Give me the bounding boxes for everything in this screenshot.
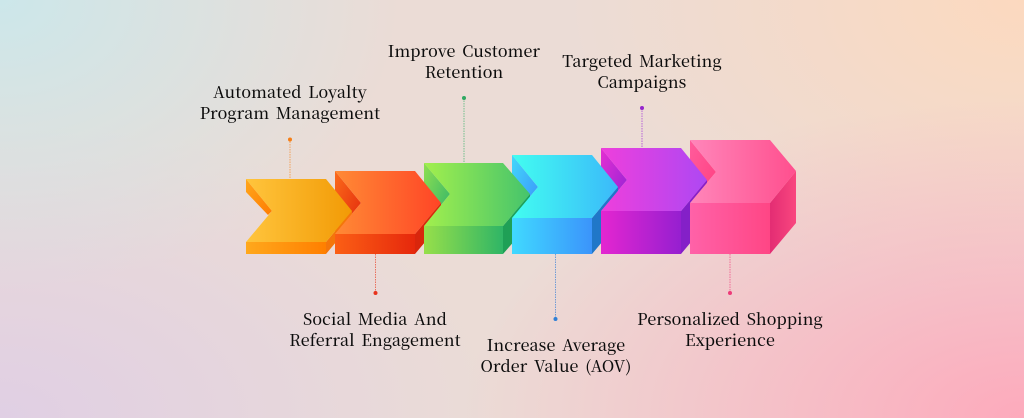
- label: Social Media And Referral Engagement: Referral Engagement: [289, 328, 461, 351]
- label: Personalized Shopping Experience: Experience: [685, 328, 775, 351]
- label: Automated Loyalty Program Management: [200, 80, 380, 124]
- label: Social Media And Referral Engagement: [289, 307, 461, 351]
- step 2: orange-red chevron: [335, 171, 441, 254]
- label: Personalized Shopping Experience: Personalized Shopping: [637, 307, 823, 330]
- label: Targeted Marketing Campaigns: Campaigns: [597, 70, 687, 93]
- step 3: green chevron: [424, 163, 530, 254]
- label: Automated Loyalty Program Management: Automated Loyalty: [213, 80, 367, 103]
- label: Increase Average Order Value (AOV): Increase Average: [487, 333, 625, 356]
- label: Increase Average Order Value (AOV): Order Value (AOV): [480, 354, 632, 377]
- label: Improve Customer Retention: Improve Customer: [388, 39, 540, 62]
- label: Targeted Marketing Campaigns: Targeted Marketing: [562, 49, 722, 72]
- label: Social Media And Referral Engagement: Social Media And: [303, 307, 447, 330]
- label: Automated Loyalty Program Management: Program Management: [200, 101, 380, 124]
- step 1: yellow chevron: [246, 179, 352, 254]
- label: Targeted Marketing Campaigns: [562, 49, 722, 93]
- connector lines and dots: [288, 96, 732, 321]
- label: Improve Customer Retention: Retention: [425, 60, 503, 83]
- label: Improve Customer Retention: [388, 39, 540, 83]
- label: Personalized Shopping Experience: [637, 307, 823, 351]
- inner notch walls: [246, 140, 716, 234]
- step 4: cyan-blue chevron: [512, 155, 618, 254]
- step 6: pink chevron: [690, 140, 796, 254]
- step 5: magenta-purple chevron: [601, 148, 707, 254]
- label: Increase Average Order Value (AOV): [480, 333, 632, 377]
